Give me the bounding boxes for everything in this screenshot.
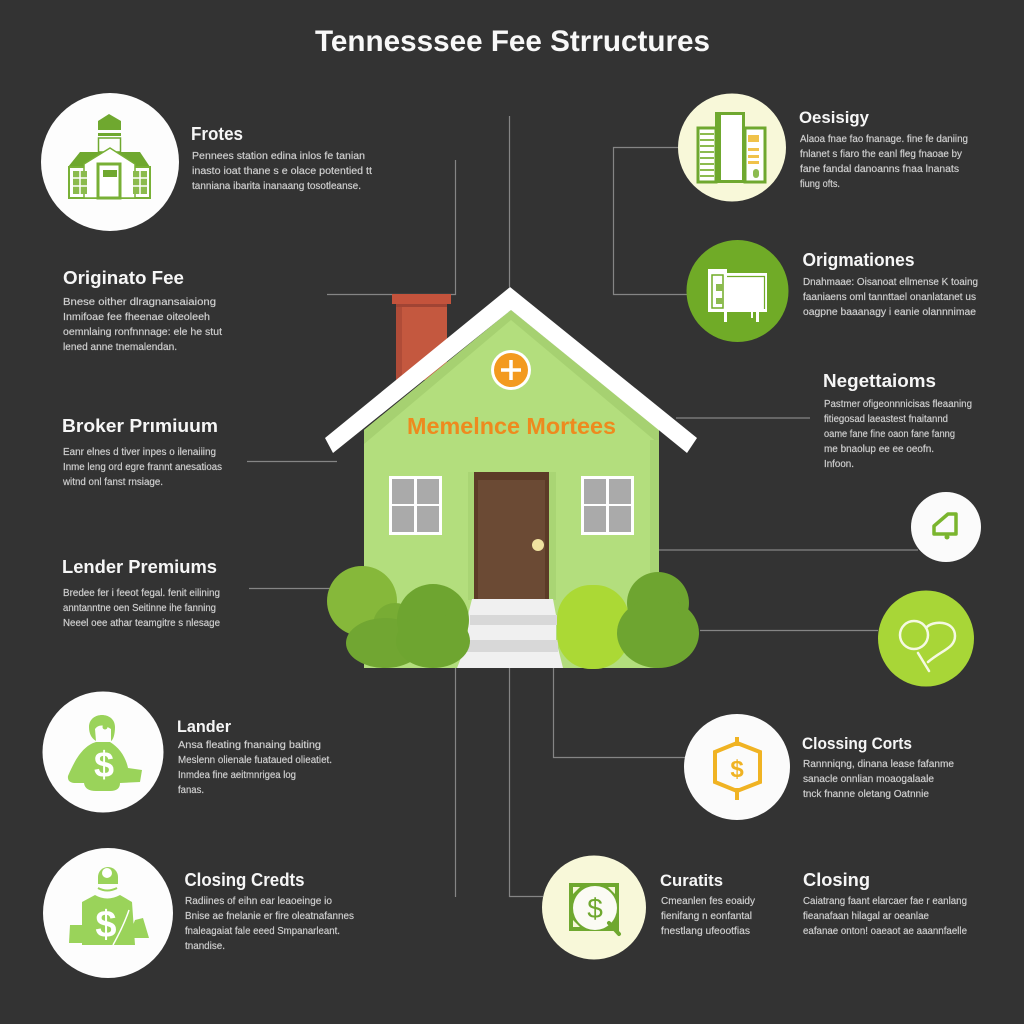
- body text: Ansa fleating fnanaing baiting: [178, 740, 321, 751]
- body text: Bnese oither dlragnansaiaiong: [63, 297, 216, 308]
- body text: Inmifoae fee fheenae oiteoleeh: [63, 312, 210, 323]
- icon: magnifier and heart badge: [878, 590, 974, 686]
- body text: Pastmer ofigeonnnicisas fleaaning: [824, 399, 972, 410]
- left window: [389, 476, 442, 535]
- body text: inasto ioat thane s e olace potentied tt: [192, 166, 372, 177]
- body text: Meslenn olienale fuataued olieatiet.: [178, 755, 332, 766]
- icon: dollar magnifier: $: [587, 893, 603, 924]
- heading: Closing Credts: [184, 870, 304, 890]
- panel: Closing Corts: [684, 714, 954, 820]
- house illustration: [325, 287, 699, 669]
- body text: Dnahmaae: Oisanoat ellmense K toaing: [803, 277, 978, 288]
- body text: fiung ofts.: [800, 179, 840, 190]
- body text: [178, 740, 332, 796]
- body text: tnandise.: [185, 941, 225, 952]
- roof: [325, 287, 697, 453]
- icon: person with dollar: [42, 692, 164, 812]
- body text: fienifang n eonfantal: [661, 911, 752, 922]
- body text: Pennees station edina inlos fe tanian: [192, 151, 365, 162]
- body text: [192, 151, 372, 192]
- roof badge: [491, 350, 531, 390]
- body text: [800, 134, 968, 190]
- title: Tennesssee Fee Strructures: [315, 25, 710, 58]
- heading: Lender Premiums: [62, 557, 217, 577]
- body text: faaniaens oml tannttael onanlatanet us: [803, 292, 976, 303]
- body text: [63, 297, 222, 353]
- connector lines: [247, 116, 918, 897]
- body text: fieanafaan hilagal ar oeanlae: [803, 911, 929, 922]
- panel: Closing Credts: [43, 848, 354, 978]
- body text: Caiatrang faant elarcaer fae r eanlang: [803, 896, 967, 907]
- heading: Broker Prımiuum: [62, 416, 218, 436]
- heading: Oesisigy: [799, 109, 870, 127]
- heading: Originato Fee: [63, 268, 184, 288]
- body text: [803, 896, 967, 937]
- icon: office buildings: [678, 94, 786, 202]
- body text: [63, 588, 220, 629]
- body text: oemnlaing ronfnnnage: ele he stut: [63, 327, 222, 338]
- body text: oagpne baaanagy i eanie olannnimae: [803, 307, 976, 318]
- chimney: [392, 294, 451, 380]
- icon: office machine: [686, 240, 788, 342]
- body text: Bredee fer i feeot fegal. fenit eilining: [63, 588, 220, 599]
- panel: Closing: [803, 870, 967, 937]
- body text: fane fandal danoanns fnaa lnanats: [800, 164, 959, 175]
- icon: person with dollar: $: [94, 744, 114, 785]
- body text: [824, 399, 972, 470]
- panel: Origmationes: [686, 240, 978, 342]
- body text: fnlanet s fiaro the eanl fleg fnaoae by: [800, 149, 962, 160]
- heading: Negettaioms: [823, 371, 936, 391]
- body text: tanniana ibarita inanaang tosotleanse.: [192, 181, 361, 192]
- body text: oame fane fine oaon fane fanng: [824, 429, 955, 440]
- body text: tnck fnanne oletang Oatnnie: [803, 789, 929, 800]
- body text: Alaoa fnae fao fnanage. fine fe daniing: [800, 134, 968, 145]
- right bushes: [557, 572, 699, 669]
- panel: Lender Premiums: [62, 557, 220, 629]
- body text: fnaleagaiat fale eeed Smpanarleant.: [185, 926, 340, 937]
- panel: Broker Primium: [62, 416, 222, 488]
- panel: Oesisigy: [678, 94, 968, 202]
- panel: Negettaioms: [823, 371, 972, 470]
- body text: Neeel oee athar teamgitre s nlesage: [63, 618, 220, 629]
- body text: fitiegosad laeastest fnaitannd: [824, 414, 948, 425]
- heading: Closing: [803, 870, 870, 890]
- icon: person with dollar and bags: [43, 848, 173, 978]
- left bushes: [327, 566, 470, 668]
- icon: person with dollar and bags: $: [95, 904, 117, 946]
- body text: Cmeanlen fes eoaidy: [661, 896, 755, 907]
- heading: Clossing Corts: [802, 735, 912, 753]
- body text: [661, 896, 755, 937]
- body text: Infoon.: [824, 459, 854, 470]
- body text: eafanae onton! oaeaot ae aaannfaelle: [803, 926, 967, 937]
- body text: lened anne tnemalendan.: [63, 342, 177, 353]
- panel: Frotes: [41, 93, 372, 231]
- icon: bell badge: [911, 492, 981, 562]
- body text: Inmdea fine aeitmnrigea log: [178, 770, 296, 781]
- steps: [457, 599, 563, 668]
- panel: Lander: [42, 692, 332, 812]
- body text: sanacle onnlian moaogalaale: [803, 774, 934, 785]
- panel: Originato Fee: [63, 268, 222, 353]
- heading: Curatits: [660, 872, 723, 890]
- body text: [185, 896, 354, 952]
- heading: Frotes: [191, 124, 243, 144]
- body text: Eanr elnes d tiver inpes o ilenaiiing: [63, 447, 216, 458]
- icon: yellow hexagon dollar: $: [730, 756, 744, 783]
- house sign: Memelnce Mortees: [407, 413, 616, 439]
- heading: Lander: [177, 718, 232, 736]
- body text: [62, 447, 222, 488]
- icon: government building: [41, 93, 179, 231]
- body text: fanas.: [178, 785, 204, 796]
- body text: Radiines of eihn ear leaoeinge io: [185, 896, 332, 907]
- body text: Bnise ae fnelanie er fire oleatnafannes: [185, 911, 354, 922]
- body text: fnestlang ufeootfias: [661, 926, 750, 937]
- body text: anntanntne oen Seitinne ihe fanning: [63, 603, 216, 614]
- body text: Inme leng ord egre frannt anesatioas: [63, 462, 222, 473]
- door: [468, 472, 556, 600]
- body text: me bnaolup ee ee oeofn.: [824, 444, 934, 455]
- icon: yellow hexagon dollar: [684, 714, 790, 820]
- body text: [803, 759, 954, 800]
- house wall: [364, 310, 659, 668]
- heading: Origmationes: [802, 250, 914, 270]
- panel: Curatits: [542, 856, 755, 960]
- body text: witnd onl fanst rnsiage.: [62, 477, 163, 488]
- body text: Rannniqng, dinana lease fafanme: [803, 759, 954, 770]
- icon: dollar magnifier: [542, 856, 646, 960]
- body text: [803, 277, 978, 318]
- right window: [581, 476, 634, 535]
